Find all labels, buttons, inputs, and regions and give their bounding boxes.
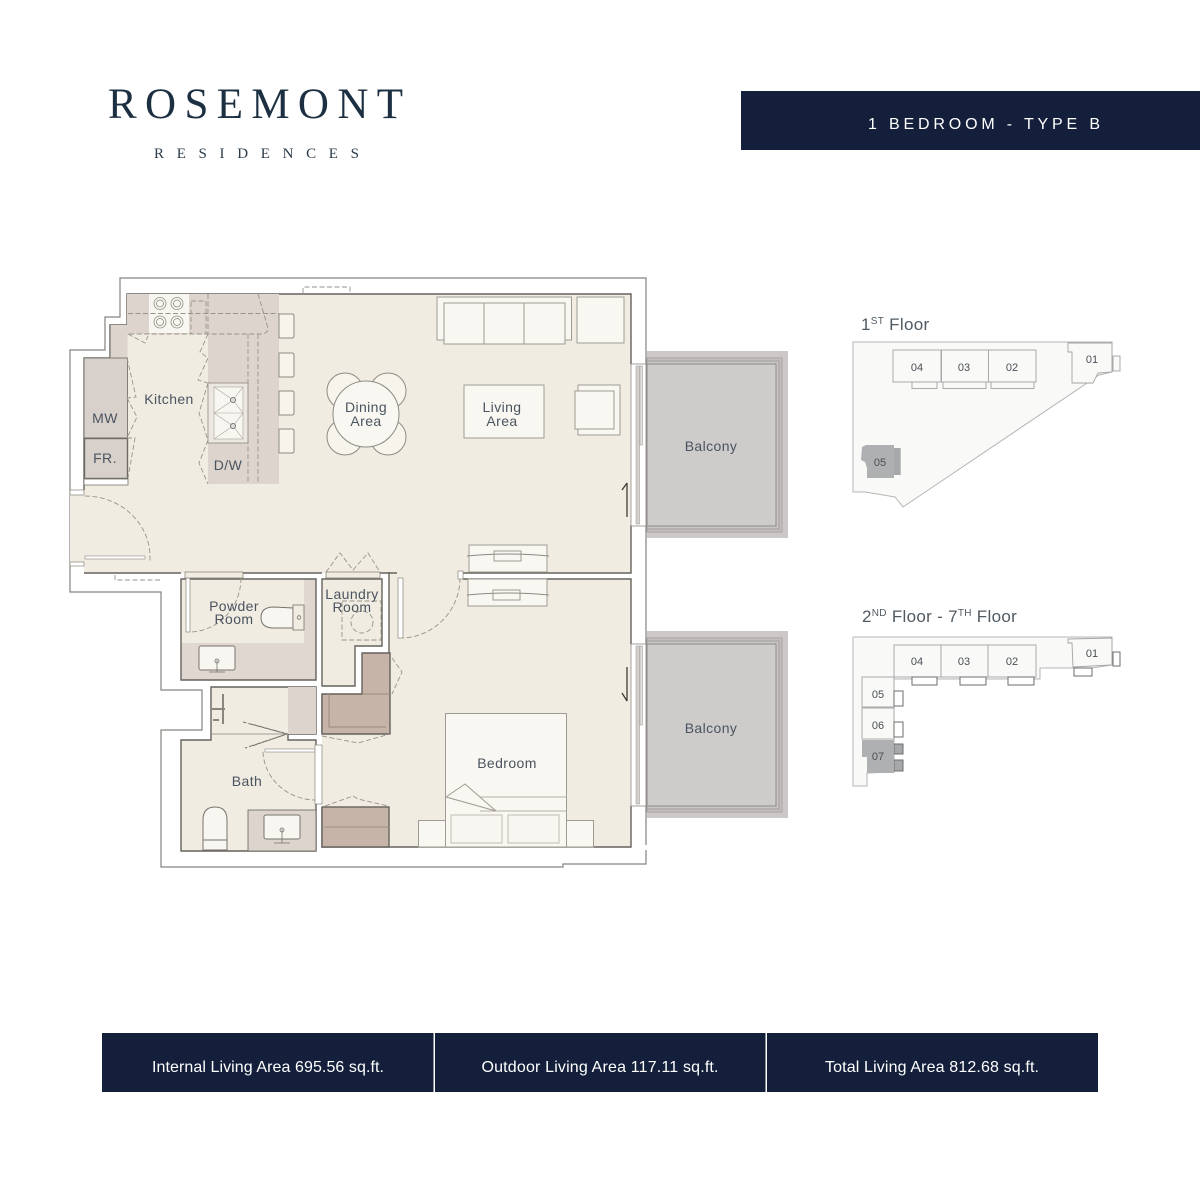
sink bbox=[208, 383, 248, 443]
title bar: unit type bbox=[741, 91, 1200, 150]
heading: Floor - 7 bbox=[887, 607, 958, 626]
toilet bbox=[203, 807, 227, 850]
kitchen labels: Kitchen bbox=[144, 391, 194, 407]
sink bbox=[199, 646, 235, 672]
coffee table bbox=[464, 385, 544, 438]
side cabinet bbox=[577, 297, 624, 343]
bath bbox=[181, 687, 322, 851]
faucet bbox=[212, 694, 225, 724]
balcony: living room bbox=[647, 351, 788, 538]
television unit bbox=[467, 545, 549, 572]
toilet bbox=[261, 605, 304, 630]
bedroom door bbox=[398, 571, 463, 638]
unit 07 highlighted bbox=[862, 740, 903, 773]
door bbox=[265, 749, 315, 752]
laundry room bbox=[322, 553, 382, 686]
units 02-04 bbox=[893, 343, 1120, 388]
island bbox=[208, 334, 279, 484]
dining table bbox=[327, 373, 406, 455]
key plan: 2nd to 7th floor: 04 bbox=[911, 656, 923, 668]
outline bbox=[853, 342, 1112, 507]
internal area: Internal Living Area 695.56 sq.ft. bbox=[152, 1059, 384, 1076]
entry door bbox=[70, 490, 150, 566]
door bbox=[186, 578, 190, 632]
key plan: 1st floor bbox=[853, 315, 1120, 507]
key plan: 2nd to 7th floor: 01 bbox=[1086, 648, 1098, 660]
nightstands bbox=[418, 820, 446, 847]
heading: TH bbox=[958, 608, 972, 619]
key plan: 1st floor: 05 bbox=[874, 457, 886, 469]
total area: Total Living Area 812.68 sq.ft. bbox=[825, 1059, 1039, 1076]
powder room: Powder bbox=[209, 598, 259, 614]
balcony: living room: Balcony bbox=[685, 438, 737, 454]
outline bbox=[853, 637, 1112, 786]
bath: Bath bbox=[232, 773, 262, 789]
cabinet white sill bbox=[84, 479, 128, 485]
vanity bbox=[248, 810, 316, 851]
key plan: 1st floor: 04 bbox=[911, 362, 923, 374]
kitchen bbox=[84, 294, 294, 485]
heading: 1 bbox=[861, 315, 871, 334]
unit 05 highlighted bbox=[861, 445, 901, 478]
sofa bbox=[437, 297, 572, 344]
key plan: 2nd to 7th floor: 03 bbox=[958, 656, 970, 668]
kitchen: D/W bbox=[214, 457, 243, 473]
coffee table: Area bbox=[486, 413, 518, 429]
walls: living and bedroom bbox=[84, 294, 631, 847]
key plan: 2nd to 7th floor: 05 bbox=[872, 689, 884, 701]
floor: living and kitchen bbox=[70, 294, 631, 573]
key plan: 2nd to 7th floor bbox=[853, 607, 1120, 786]
logo: Rosemont Residences bbox=[108, 81, 403, 162]
area summary bar bbox=[102, 1033, 1098, 1092]
kitchen: FR. bbox=[93, 450, 117, 466]
dining table: Area bbox=[350, 413, 382, 429]
balconies bbox=[894, 652, 1120, 737]
window: living room bbox=[622, 364, 646, 526]
floor plan bbox=[70, 278, 788, 867]
armchair bbox=[575, 385, 620, 435]
upper left cabinet bbox=[110, 325, 128, 358]
stove bbox=[149, 294, 189, 333]
mirror unit bbox=[467, 579, 549, 606]
heading: 2 bbox=[862, 607, 872, 626]
wall cabinets bbox=[84, 358, 128, 438]
heading: ND bbox=[872, 608, 887, 619]
key plan: 1st floor: 02 bbox=[1006, 362, 1018, 374]
key plan: 2nd to 7th floor: 07 bbox=[872, 751, 884, 763]
dashed bulkhead marks bbox=[115, 287, 350, 580]
kitchen: MW bbox=[92, 410, 118, 426]
key plan: 1st floor: 03 bbox=[958, 362, 970, 374]
outdoor area: Outdoor Living Area 117.11 sq.ft. bbox=[482, 1059, 718, 1076]
powder room: Room bbox=[215, 611, 253, 627]
floor: bedroom and hall bbox=[322, 572, 631, 847]
title bar: unit type: 1 BEDROOM - TYPE B bbox=[868, 116, 1100, 133]
heading: ST bbox=[871, 316, 884, 327]
heading: Floor bbox=[884, 315, 929, 334]
laundry room: Laundry bbox=[325, 586, 379, 602]
wardrobe units bbox=[322, 653, 402, 743]
coffee table: Living bbox=[483, 399, 521, 415]
fridge bbox=[84, 438, 128, 478]
powder room bbox=[181, 572, 316, 680]
key plan: 2nd to 7th floor: 02 bbox=[1006, 656, 1018, 668]
bath vanity closet bbox=[322, 796, 389, 847]
logo: Rosemont Residences: ROSEMONT bbox=[108, 81, 403, 128]
key plan: 2nd to 7th floor: 06 bbox=[872, 720, 884, 732]
stools bbox=[279, 314, 294, 453]
dining table: Dining bbox=[345, 399, 387, 415]
exterior outline bbox=[70, 278, 646, 867]
window: bedroom bbox=[622, 644, 646, 806]
balcony: bedroom bbox=[647, 631, 788, 818]
logo: Rosemont Residences: RESIDENCES bbox=[154, 146, 359, 162]
top counter bbox=[127, 294, 279, 334]
heading: Floor bbox=[972, 607, 1017, 626]
key plan: 1st floor: 01 bbox=[1086, 354, 1098, 366]
balcony: bedroom: Balcony bbox=[685, 720, 737, 736]
bed bbox=[418, 714, 594, 847]
dashed cabinet outlines bbox=[127, 294, 279, 484]
bed: Bedroom bbox=[477, 755, 537, 771]
folding shower door bbox=[243, 722, 287, 748]
laundry room: Room bbox=[333, 599, 371, 615]
units bbox=[862, 638, 1112, 739]
